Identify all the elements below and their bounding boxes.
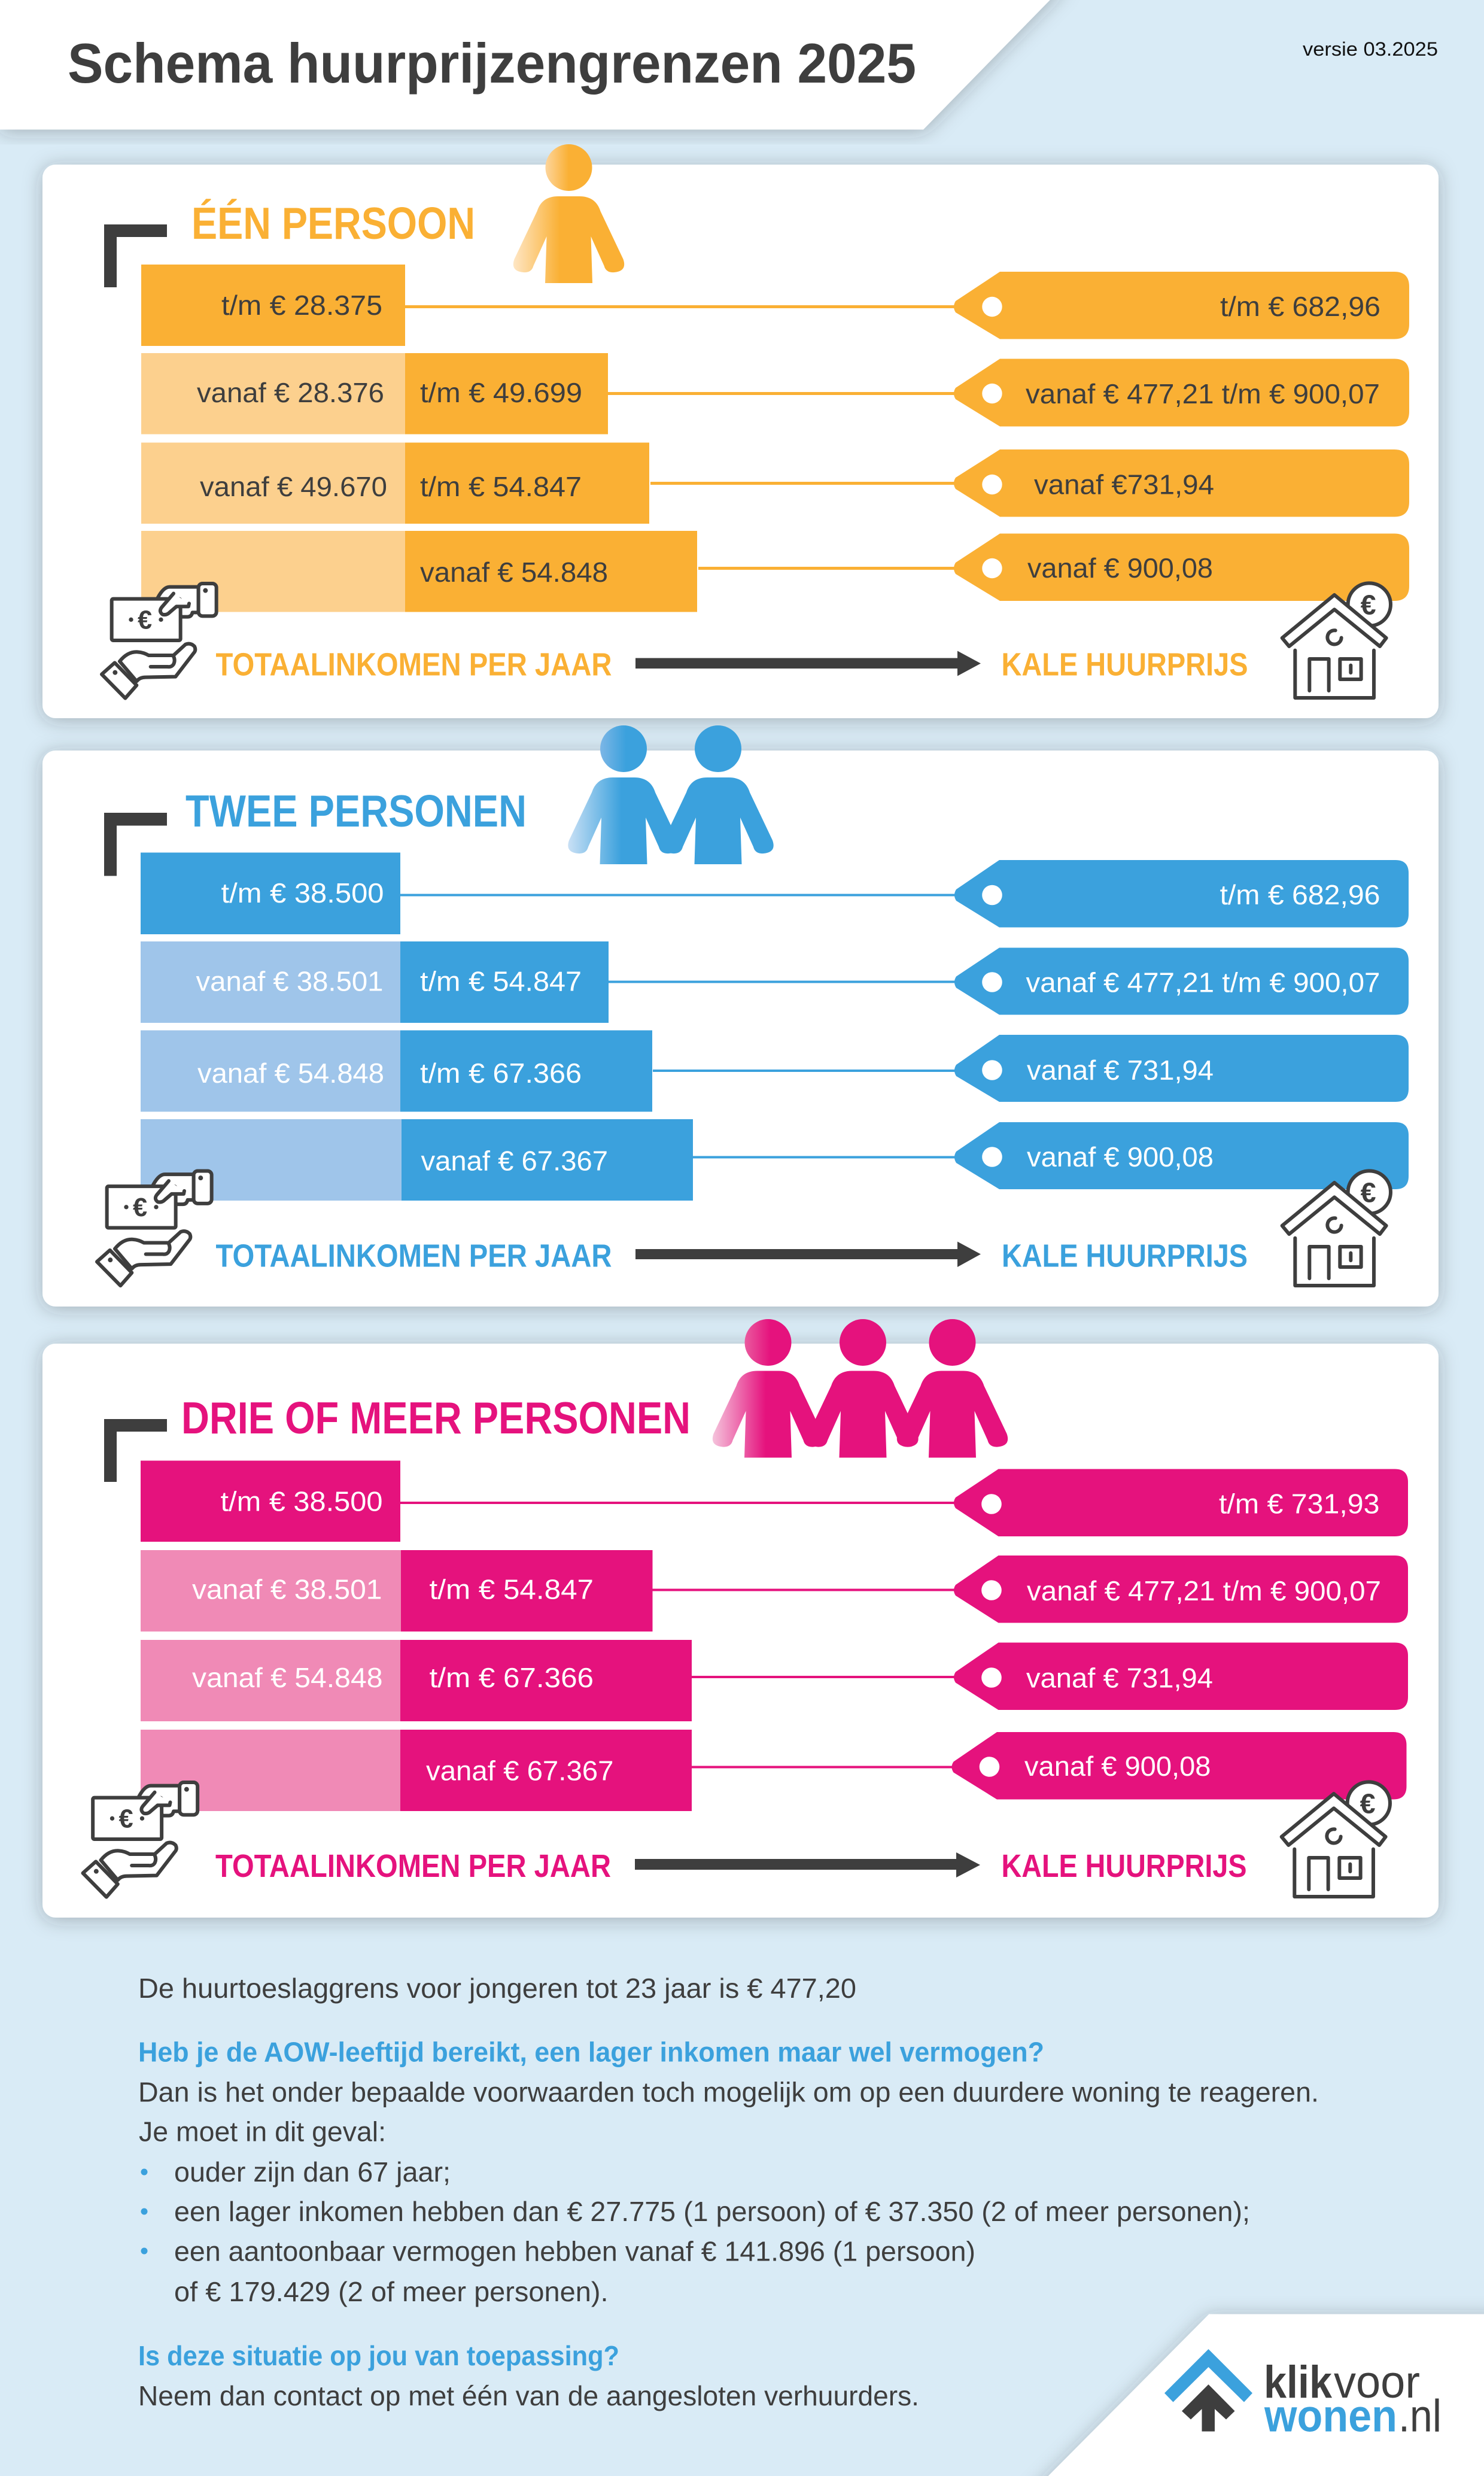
connector lines bbox=[400, 895, 957, 1158]
corner bracket bbox=[104, 224, 167, 287]
income labels: vanaf € 67.367 bbox=[421, 1146, 608, 1177]
arrow bbox=[635, 651, 981, 676]
income labels: vanaf € 67.367 bbox=[426, 1755, 614, 1786]
income labels: t/m € 38.500 bbox=[220, 1485, 383, 1517]
icon: house with coin: € bbox=[1361, 590, 1376, 621]
icon: two people bbox=[568, 725, 774, 864]
logo: klikvoorwonen.nl bbox=[1164, 2349, 1442, 2442]
icon: money hands: € bbox=[118, 1804, 133, 1833]
paragraph: Dan is het onder bepaalde voorwaarden toch mogelijk om op een duurdere woning te reageren. bbox=[138, 2077, 1319, 2108]
logo chevron bbox=[1164, 2349, 1252, 2402]
price labels: vanaf € 477,21 t/m € 900,07 bbox=[1026, 378, 1380, 409]
icon: money hands: € bbox=[133, 1193, 147, 1222]
logo word: .nl: .nl bbox=[1398, 2390, 1442, 2442]
price labels: vanaf €731,94 bbox=[1034, 469, 1214, 500]
arrow bbox=[635, 1852, 980, 1877]
logo word: voor: voor bbox=[1334, 2357, 1420, 2408]
price tags bbox=[954, 272, 1409, 601]
bullet list bbox=[141, 2156, 1250, 2307]
header banner bbox=[0, 0, 1068, 129]
info text block bbox=[138, 1973, 1319, 2411]
icon: three people bbox=[713, 1319, 1008, 1458]
footer label: rent: KALE HUURPRIJS bbox=[1002, 646, 1248, 682]
price labels bbox=[1024, 1488, 1381, 1782]
income labels: vanaf € 38.501 bbox=[196, 966, 383, 997]
price labels: vanaf € 731,94 bbox=[1027, 1055, 1214, 1086]
price labels: t/m € 682,96 bbox=[1220, 879, 1380, 910]
income labels: t/m € 28.375 bbox=[221, 290, 382, 321]
price labels bbox=[1026, 291, 1380, 584]
income labels: vanaf € 54.848 bbox=[197, 1058, 384, 1089]
heading: ÉÉN PERSOON bbox=[191, 198, 475, 248]
bullet list: een lager inkomen hebben dan € 27.775 (1 persoon) of € 37.350 (2 of meer personen); bbox=[174, 2196, 1250, 2227]
income labels: t/m € 38.500 bbox=[221, 877, 384, 909]
arrow bbox=[635, 1241, 981, 1267]
panel background bbox=[42, 751, 1439, 1307]
footer label: income: TOTAALINKOMEN PER JAAR bbox=[215, 1848, 611, 1884]
footer label: income: TOTAALINKOMEN PER JAAR bbox=[215, 646, 612, 682]
icon: house with coin: € bbox=[1360, 1788, 1376, 1819]
price labels: vanaf € 900,08 bbox=[1027, 552, 1213, 584]
heading: situation: Is deze situatie op jou van toepassing? bbox=[138, 2340, 619, 2371]
paragraph line: Je moet in dit geval: bbox=[139, 2116, 386, 2147]
logo word: wonen: wonen bbox=[1264, 2390, 1397, 2442]
income bars bbox=[141, 265, 697, 612]
income labels: t/m € 54.847 bbox=[420, 966, 582, 997]
price labels: vanaf € 900,08 bbox=[1024, 1751, 1211, 1782]
income bars bbox=[141, 852, 693, 1201]
price labels: t/m € 731,93 bbox=[1219, 1488, 1380, 1519]
corner bracket bbox=[104, 813, 167, 876]
title: Schema huurprijzengrenzen 2025 bbox=[68, 32, 916, 95]
price tags bbox=[954, 860, 1409, 1189]
heading: AOW: Heb je de AOW-leeftijd bereikt, een lager inkomen maar wel vermogen? bbox=[138, 2036, 1044, 2067]
footer label: rent: KALE HUURPRIJS bbox=[1002, 1848, 1247, 1884]
logo arrow bbox=[1182, 2384, 1235, 2431]
price labels bbox=[1026, 879, 1380, 1172]
income labels: t/m € 67.366 bbox=[430, 1662, 594, 1693]
price labels: vanaf € 477,21 t/m € 900,07 bbox=[1026, 967, 1380, 998]
bullet list: een aantoonbaar vermogen hebben vanaf € 141.896 (1 persoon) bbox=[174, 2236, 975, 2267]
icon: money hands bbox=[83, 1782, 197, 1897]
icon: house with coin bbox=[1282, 1782, 1390, 1897]
price labels: vanaf € 477,21 t/m € 900,07 bbox=[1027, 1575, 1381, 1606]
corner bracket bbox=[104, 1419, 167, 1482]
price labels: t/m € 682,96 bbox=[1220, 291, 1380, 322]
income labels: t/m € 54.847 bbox=[430, 1574, 594, 1605]
price labels: vanaf € 731,94 bbox=[1026, 1663, 1213, 1694]
bullet list: ouder zijn dan 67 jaar; bbox=[174, 2156, 451, 2188]
income labels bbox=[196, 877, 608, 1177]
income labels: vanaf € 54.848 bbox=[192, 1662, 383, 1693]
panel: drie of meer personen bbox=[42, 1319, 1439, 1918]
logo word: klik: klik bbox=[1264, 2357, 1333, 2408]
heading: TWEE PERSONEN bbox=[186, 786, 527, 836]
youth allowance note: De huurtoeslaggrens voor jongeren tot 23 jaar is € 477,20 bbox=[138, 1973, 856, 2004]
income labels: t/m € 54.847 bbox=[420, 471, 582, 502]
income labels: vanaf € 54.848 bbox=[420, 557, 608, 588]
income labels: vanaf € 28.376 bbox=[197, 377, 384, 408]
logo corner panel bbox=[1029, 2314, 1484, 2476]
panel: een persoon bbox=[42, 144, 1439, 718]
income bars bbox=[141, 1460, 692, 1811]
income labels: t/m € 49.699 bbox=[420, 377, 582, 408]
connector lines bbox=[400, 1503, 957, 1767]
icon: house with coin: € bbox=[1361, 1177, 1376, 1208]
icon: house with coin bbox=[1282, 1171, 1391, 1286]
version label: versie 03.2025 bbox=[1303, 38, 1438, 60]
icon: person bbox=[513, 144, 624, 283]
icon: money hands: € bbox=[138, 606, 152, 634]
panel background bbox=[42, 165, 1439, 718]
price tags bbox=[951, 1469, 1408, 1799]
footer label: income: TOTAALINKOMEN PER JAAR bbox=[215, 1238, 612, 1274]
heading: DRIE OF MEER PERSONEN bbox=[181, 1393, 691, 1443]
income labels: t/m € 67.366 bbox=[420, 1058, 582, 1089]
panel background bbox=[42, 1344, 1439, 1918]
income labels bbox=[197, 290, 608, 588]
price labels: vanaf € 900,08 bbox=[1027, 1141, 1214, 1172]
panel: twee personen bbox=[42, 725, 1439, 1307]
income labels: vanaf € 49.670 bbox=[200, 471, 387, 502]
icon: house with coin bbox=[1282, 583, 1391, 698]
connector lines bbox=[405, 306, 957, 569]
icon: money hands bbox=[102, 584, 217, 698]
income labels bbox=[192, 1485, 614, 1786]
footer label: rent: KALE HUURPRIJS bbox=[1002, 1238, 1248, 1274]
bullet list: of € 179.429 (2 of meer personen). bbox=[174, 2276, 608, 2307]
icon: money hands bbox=[97, 1171, 212, 1286]
contact line: Neem dan contact op met één van de aangesloten verhuurders. bbox=[138, 2380, 919, 2411]
income labels: vanaf € 38.501 bbox=[192, 1574, 382, 1605]
